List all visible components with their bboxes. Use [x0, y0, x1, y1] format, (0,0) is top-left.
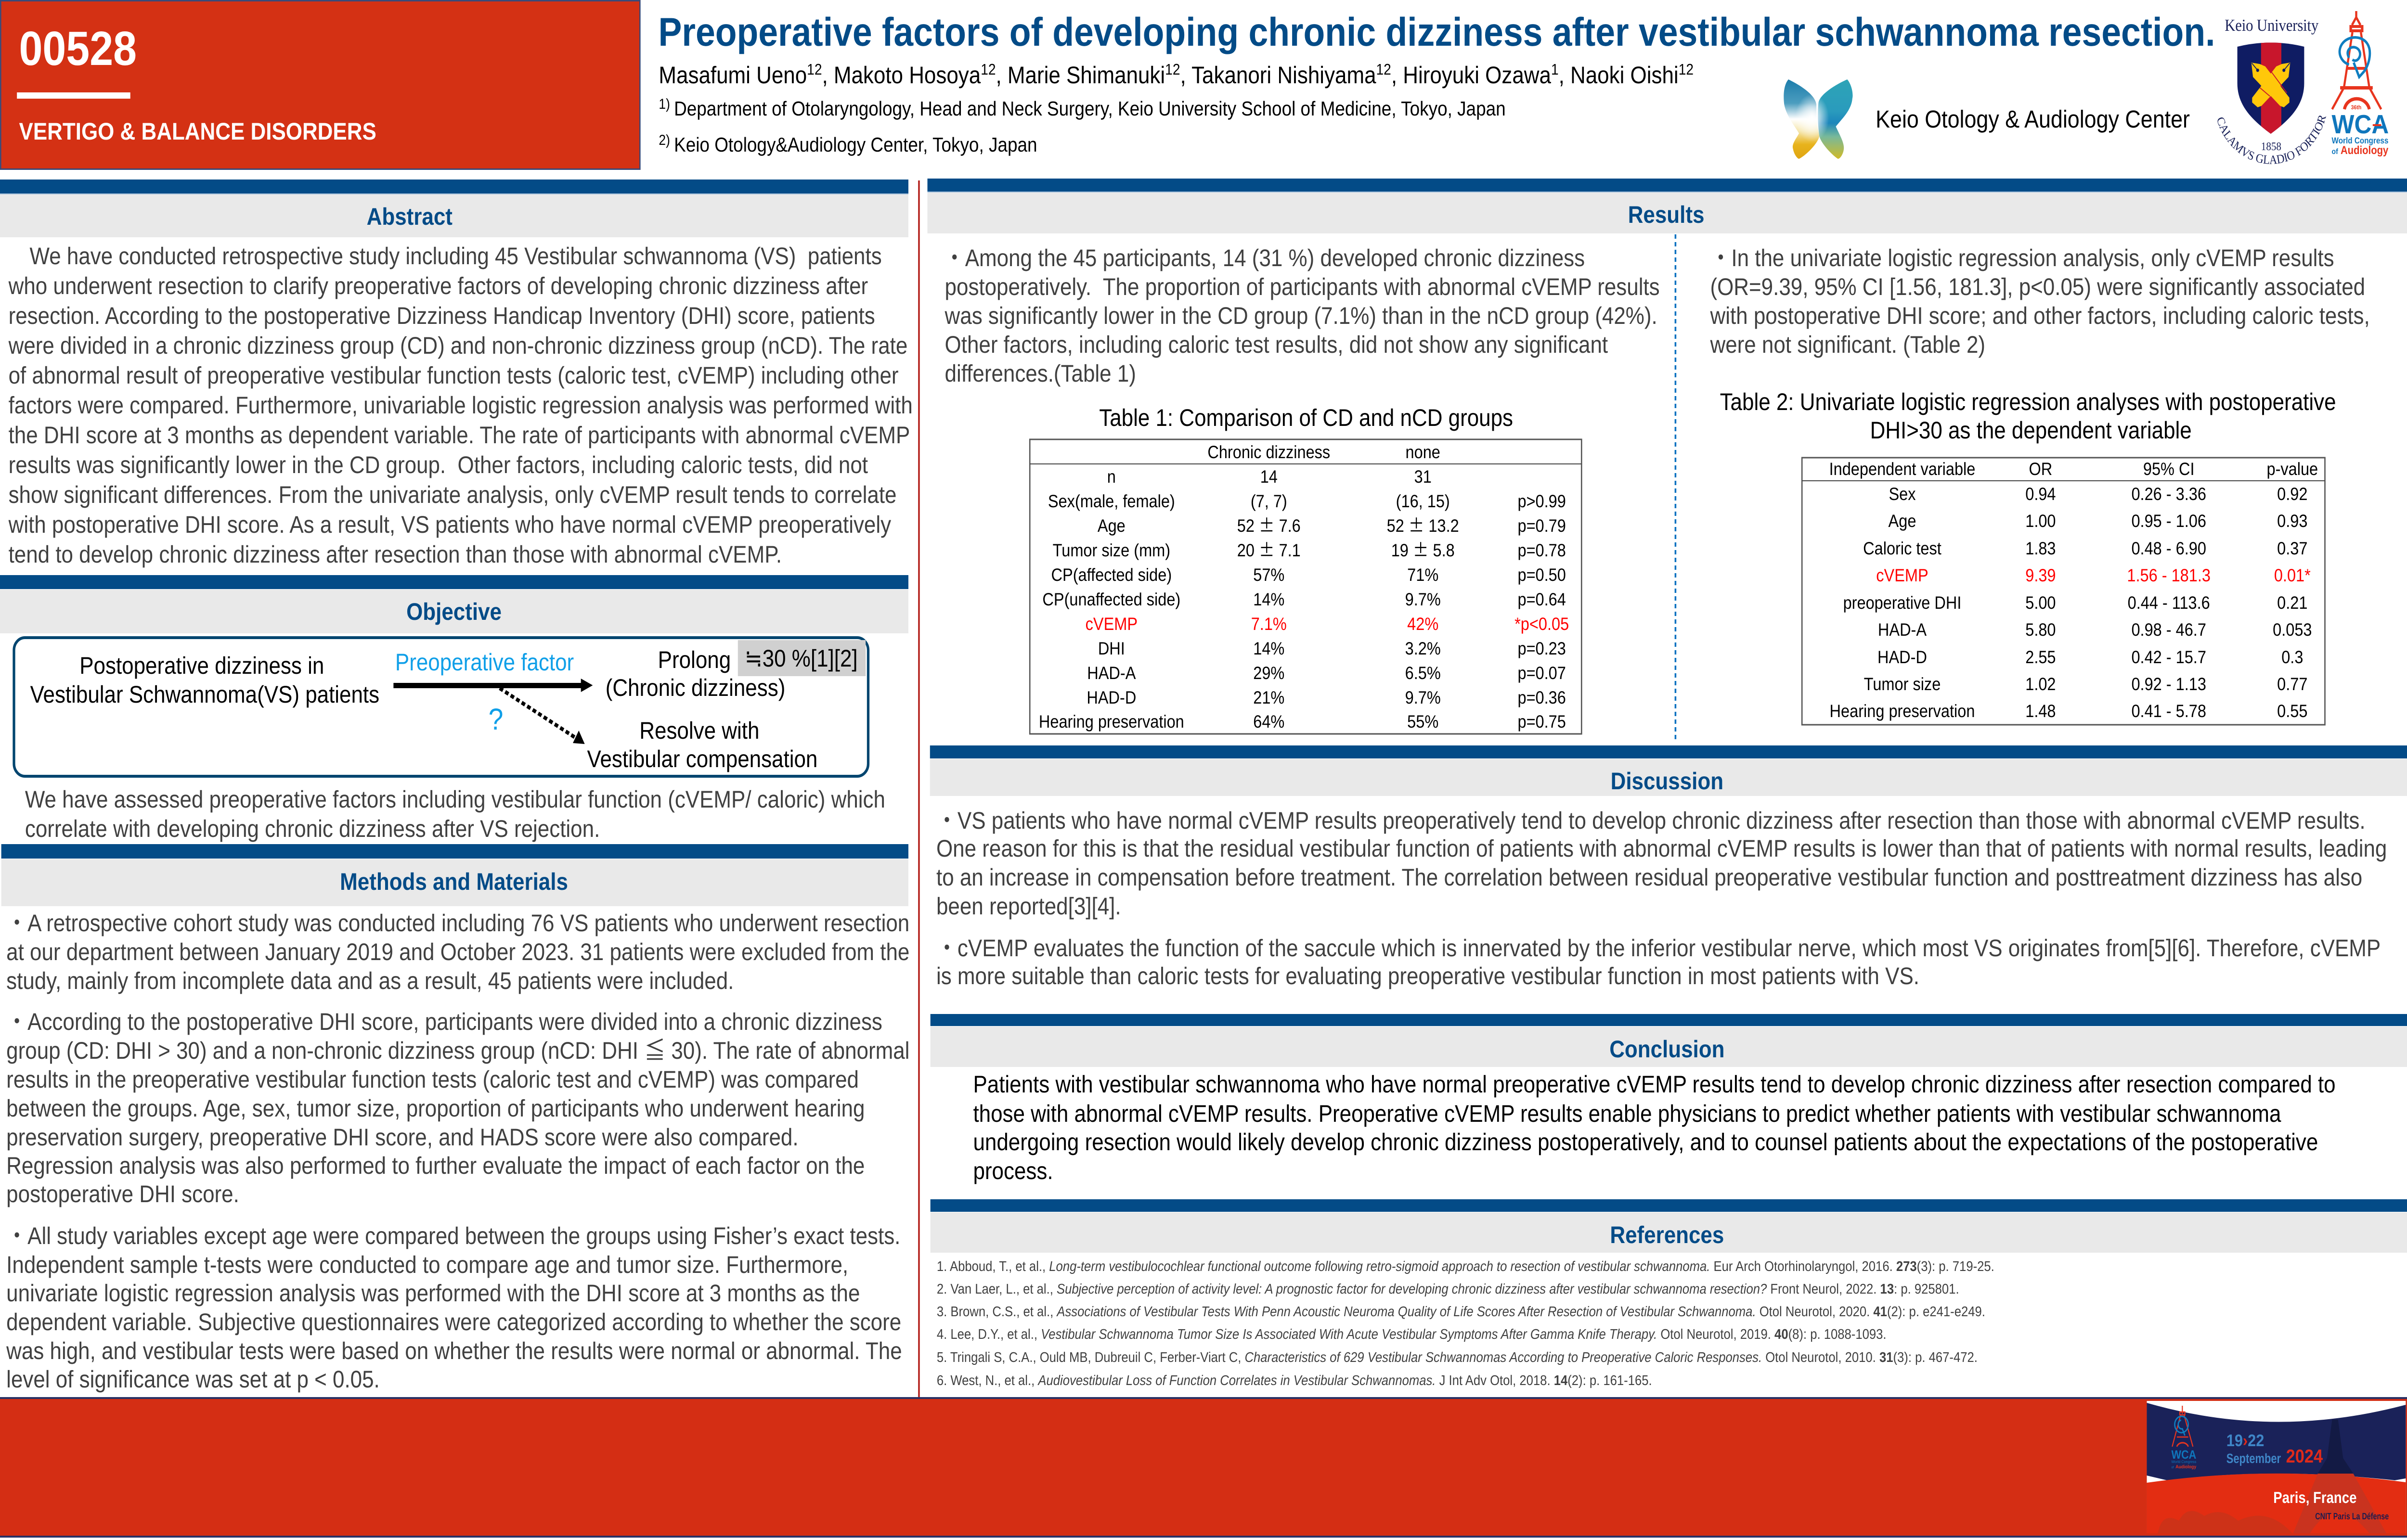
arrow: solid to chronic dizziness — [393, 679, 593, 692]
authors: 1 — [1551, 61, 1559, 78]
table 2: 0.92 — [2277, 484, 2307, 504]
table 1: 7.1% — [1251, 614, 1287, 634]
authors: , Marie Shimanuki — [996, 62, 1165, 89]
table 1: HAD-A — [1087, 663, 1136, 683]
authors: 12 — [807, 61, 822, 78]
methods paragraph 3: Independent sample t-tests were conducted to compare age and tumor size. Furthermore, — [6, 1251, 848, 1278]
abstract body text: tend to develop chronic dizziness after resection than those with abnormal cVEMP. — [9, 541, 782, 568]
table 2: 0.48 - 6.90 — [2131, 539, 2206, 558]
methods paragraph 2: between the groups. Age, sex, tumor size, proportion of participants who underwent hearing — [6, 1095, 865, 1122]
table 1: Age — [1098, 516, 1126, 536]
resolve label: Resolve with — [639, 717, 759, 744]
logo: Keio Otology and Audiology Center butterfly — [1784, 79, 1853, 159]
abstract body text: We have conducted retrospective study including 45 Vestibular schwannoma (VS) patients — [30, 243, 882, 270]
congress banner: September — [2226, 1451, 2281, 1466]
abstract body text: of abnormal result of preoperative vestibular function tests (caloric test, cVEMP) including other — [9, 362, 899, 389]
white accent bar — [17, 92, 130, 99]
panel: results — [928, 179, 2407, 741]
table 2: 0.21 — [2277, 593, 2307, 613]
heading: results: Results — [1628, 201, 1704, 228]
chronic dizziness label: (Chronic dizziness) — [606, 674, 785, 701]
table 2: 0.37 — [2277, 539, 2307, 558]
table 1: p=0.07 — [1517, 663, 1566, 683]
methods paragraph 2: Regression analysis was also performed to further evaluate the impact of each factor on the — [6, 1152, 865, 1179]
table 1: 14 — [1260, 467, 1278, 487]
table 2: Caloric test — [1863, 539, 1941, 558]
table 2: HAD-D — [1877, 647, 1927, 667]
reference list: 3. Brown, C.S., et al., Associations of Vestibular Tests With Penn Acoustic Neuroma Quality of Life Scores After Resection of Vestibular Schwannoma. Otol Neurotol, 2020. 41(2): p. e241-e249. — [937, 1304, 1985, 1320]
heading: discussion: Discussion — [1611, 768, 1723, 795]
table 1: 52 ± 13.2 — [1387, 511, 1459, 537]
preoperative factor label: Preoperative factor — [395, 649, 574, 676]
table 2: 0.01* — [2274, 565, 2311, 585]
table 2: 0.3 — [2281, 647, 2303, 667]
methods paragraph 2: results in the preoperative vestibular function tests (caloric test and cVEMP) was compared — [6, 1066, 859, 1093]
discussion paragraph 1: been reported[3][4]. — [936, 893, 1121, 920]
authors: 12 — [1679, 61, 1694, 78]
table 2: 0.92 - 1.13 — [2131, 674, 2206, 694]
methods paragraph 3: dependent variable. Subjective questionnaires were categorized according to whether the score — [6, 1309, 901, 1335]
table 2: 1.48 — [2025, 701, 2056, 721]
results text right: (OR=9.39, 95% CI [1.56, 181.3], p<0.05) were significantly associated — [1710, 273, 2365, 300]
table 1: (16, 15) — [1396, 491, 1450, 511]
title: Preoperative factors of developing chronic dizziness after vestibular schwannoma resection. — [659, 10, 2215, 54]
table 1: Tumor size (mm) — [1053, 540, 1170, 560]
table 1: p=0.64 — [1517, 590, 1566, 609]
results text left: ・Among the 45 participants, 14 (31 %) developed chronic dizziness — [944, 244, 1585, 271]
methods paragraph 1: ・A retrospective cohort study was conducted including 76 VS patients who underwent resection — [6, 910, 909, 937]
table 2: 9.39 — [2025, 565, 2056, 585]
table 2: 0.26 - 3.36 — [2131, 484, 2206, 504]
table 1: 9.7% — [1405, 590, 1441, 609]
table 1: 19 ± 5.8 — [1391, 536, 1455, 562]
mini WCA logo: WCA — [2171, 1448, 2196, 1462]
objective statement: We have assessed preoperative factors including vestibular function (cVEMP/ caloric) which — [25, 786, 885, 813]
header badge: abstract number and category — [0, 1, 640, 169]
panel: abstract — [0, 180, 919, 568]
table 1: 71% — [1407, 565, 1438, 585]
table 2: Age — [1889, 511, 1916, 531]
abstract body text: resection. According to the postoperative Dizziness Handicap Inventory (DHI) score, patients — [9, 302, 875, 329]
prolong label: Prolong — [658, 646, 731, 673]
results text right: were not significant. (Table 2) — [1710, 331, 1985, 358]
logo: Keio University crest: 1858 — [2261, 141, 2281, 153]
table 2: 0.93 — [2277, 511, 2307, 531]
panel: references — [931, 1199, 2407, 1388]
logo: Keio University crest: Keio University — [2225, 16, 2319, 35]
authors: Masafumi Ueno — [659, 62, 807, 89]
table 2 title: DHI>30 as the dependent variable — [1870, 417, 2192, 444]
congress banner — [2147, 1401, 2406, 1533]
table 1: 64% — [1253, 712, 1284, 732]
objective statement: correlate with developing chronic dizziness after VS rejection. — [25, 815, 600, 842]
results text left: postoperatively. The proportion of participants with abnormal cVEMP results — [945, 273, 1660, 300]
table 1: Hearing preservation — [1039, 712, 1184, 732]
column divider — [918, 180, 920, 1398]
panel: discussion — [930, 745, 2407, 989]
table 2: 0.98 - 46.7 — [2131, 620, 2206, 640]
methods paragraph 2: postoperative DHI score. — [6, 1181, 239, 1207]
abstract body text: the DHI score at 3 months as dependent variable. The rate of participants with abnormal cVEMP — [9, 422, 909, 449]
congress banner: CNIT Paris La Défense — [2315, 1512, 2389, 1522]
table 1: p=0.36 — [1517, 688, 1566, 707]
table 2: OR — [2029, 459, 2052, 479]
table 2: 0.95 - 1.06 — [2131, 511, 2206, 531]
table 1: 52 ± 7.6 — [1237, 511, 1301, 537]
abstract number: 00528 — [19, 22, 137, 76]
authors: 12 — [1376, 61, 1391, 78]
footer band — [0, 1397, 2407, 1538]
discussion paragraph 1: to an increase in compensation before treatment. The correlation between residual preoperative vestibular function and posttreatment dizziness has also — [936, 864, 2362, 891]
table 1: p=0.78 — [1517, 540, 1566, 560]
question mark: ? — [489, 703, 503, 736]
study population label: Vestibular Schwannoma(VS) patients — [30, 681, 379, 708]
methods paragraph 2: group (CD: DHI > 30) and a non-chronic dizziness group (nCD: DHI ≦ 30). The rate of abnormal — [6, 1037, 909, 1064]
study population label: Postoperative dizziness in — [79, 652, 324, 679]
table 1: (7, 7) — [1251, 491, 1287, 511]
heading: conclusion: Conclusion — [1609, 1036, 1724, 1063]
table 2: 0.77 — [2277, 674, 2307, 694]
discussion paragraph 2: ・cVEMP evaluates the function of the saccule which is innervated by the inferior vestibular nerve, which most VS originates from[5][6]. Therefore, cVEMP — [936, 935, 2380, 962]
congress banner: 2024 — [2286, 1446, 2323, 1467]
table 1: 21% — [1253, 688, 1284, 707]
heading: objective: Objective — [406, 598, 502, 625]
discussion paragraph 1: One reason for this is that the residual vestibular function of patients with abnormal cVEMP results is lower than that of patients with normal results, leading — [936, 835, 2387, 862]
abstract body text: show significant differences. From the univariate analysis, only cVEMP result tends to correlate — [9, 481, 897, 508]
reference list: 6. West, N., et al., Audiovestibular Loss of Function Correlates in Vestibular Schwannomas. J Int Adv Otol, 2018. 14(2): p. 161-165. — [937, 1373, 1652, 1388]
table 1: 14% — [1253, 639, 1284, 658]
mini WCA logo — [2171, 1406, 2197, 1470]
methods paragraph 2: preservation surgery, preoperative DHI score, and HADS score were also compared. — [6, 1124, 799, 1151]
methods paragraph 3: was high, and vestibular tests were based on whether the results were normal or abnormal. The — [6, 1337, 902, 1364]
table 1: *p<0.05 — [1514, 614, 1569, 634]
table 2: p-value — [2266, 459, 2318, 479]
eiffel tower silhouette — [2158, 1420, 2386, 1533]
reference list: 1. Abboud, T., et al., Long-term vestibulocochlear functional outcome following retro-sigmoid approach to resection of vestibular schwannoma. Eur Arch Otorhinolaryngol, 2016. 273(3): p. 719-25. — [937, 1259, 1994, 1274]
table 2: 0.55 — [2277, 701, 2307, 721]
table 2: Independent variable — [1829, 459, 1975, 479]
congress location: Paris, France — [2273, 1489, 2356, 1506]
table 1: 20 ± 7.1 — [1237, 536, 1301, 562]
table 2: 1.56 - 181.3 — [2127, 565, 2211, 585]
resolve label: Vestibular compensation — [587, 745, 817, 772]
logo: World Congress of Audiology: Audiology — [2341, 144, 2389, 157]
methods paragraph 1: study, mainly from incomplete data and as a result, 45 patients were included. — [6, 967, 734, 994]
affiliations: 1) — [659, 96, 670, 112]
panel: conclusion — [931, 1014, 2407, 1184]
table 1 title: Table 1: Comparison of CD and nCD groups — [1099, 404, 1513, 431]
table 2: 0.053 — [2273, 620, 2312, 640]
center name: Keio Otology & Audiology Center — [1876, 105, 2190, 133]
methods paragraph 3: univariate logistic regression analysis was performed with the DHI score at 3 months as the — [6, 1280, 860, 1307]
table 1: CP(affected side) — [1051, 565, 1172, 585]
affiliations: Department of Otolaryngology, Head and Neck Surgery, Keio University School of Medicine, Tokyo, Japan — [674, 97, 1506, 120]
authors: 12 — [1165, 61, 1180, 78]
arrow: dotted to vestibular compensation — [500, 688, 585, 744]
table 1: cVEMP — [1086, 614, 1138, 634]
abstract body text: with postoperative DHI score. As a result, VS patients who have normal cVEMP preoperatively — [8, 511, 891, 538]
table 2: 5.00 — [2025, 593, 2056, 613]
logo: Keio University crest — [2217, 16, 2326, 164]
table 1: p=0.79 — [1517, 516, 1566, 536]
objective diagram — [14, 638, 868, 776]
discussion paragraph 2: is more suitable than caloric tests for evaluating preoperative vestibular function in most patients with VS. — [936, 962, 1919, 989]
abstract body text: were divided in a chronic dizziness group (CD) and non-chronic dizziness group (nCD). The rate — [8, 332, 907, 359]
category label: VERTIGO & BALANCE DISORDERS — [19, 118, 376, 145]
heading: references: References — [1610, 1221, 1724, 1248]
table 2: 0.42 - 15.7 — [2131, 647, 2206, 667]
table 1: 42% — [1407, 614, 1438, 634]
mini WCA logo: Audiology — [2175, 1464, 2197, 1470]
abstract body text: factors were compared. Furthermore, univariable logistic regression analysis was performed with — [9, 392, 913, 419]
table 1: DHI — [1098, 639, 1125, 658]
results text left: differences.(Table 1) — [945, 360, 1136, 387]
logo: World Congress of Audiology: World Congress — [2332, 136, 2388, 145]
table 1: HAD-D — [1087, 688, 1136, 707]
mini WCA logo: of — [2171, 1465, 2174, 1469]
table 1: 31 — [1414, 467, 1432, 487]
table 1: 3.2% — [1405, 639, 1441, 658]
affiliations: 2) — [659, 132, 670, 148]
authors: , Hiroyuki Ozawa — [1391, 62, 1551, 89]
methods paragraph 3: ・All study variables except age were compared between the groups using Fisher’s exact tests. — [6, 1222, 900, 1249]
table 2: cVEMP — [1876, 565, 1928, 585]
table 2: 0.94 — [2025, 484, 2056, 504]
table 1: p=0.50 — [1517, 565, 1566, 585]
authors: , Makoto Hosoya — [822, 62, 981, 89]
logo: World Congress of Audiology: of — [2332, 148, 2338, 156]
panel: objective — [0, 575, 908, 842]
logo: World Congress of Audiology: WCA — [2332, 109, 2389, 139]
table 1: 9.7% — [1405, 688, 1441, 707]
table 2: Hearing preservation — [1830, 701, 1975, 721]
affiliations: Keio Otology&Audiology Center, Tokyo, Japan — [674, 133, 1037, 156]
table 1: Sex(male, female) — [1048, 491, 1175, 511]
panel: methods and materials — [1, 844, 916, 1393]
table 2: 0.41 - 5.78 — [2131, 701, 2206, 721]
abstract body text: results was significantly lower in the CD group. Other factors, including caloric tests, did not — [9, 451, 868, 478]
results text right: with postoperative DHI score; and other factors, including caloric tests, — [1710, 302, 2370, 329]
discussion paragraph 1: ・VS patients who have normal cVEMP results preoperatively tend to develop chronic dizziness after resection than those with abnormal cVEMP results. — [936, 807, 2366, 834]
table 2: 2.55 — [2025, 647, 2056, 667]
results column divider — [1674, 234, 1676, 741]
table 1 — [1030, 439, 1581, 734]
table 1: p=0.23 — [1517, 639, 1566, 658]
table 1: CP(unaffected side) — [1042, 590, 1180, 609]
table 1: p=0.75 — [1517, 712, 1566, 732]
conclusion text: Patients with vestibular schwannoma who have normal preoperative cVEMP results tend to develop chronic dizziness after resection compared to — [973, 1071, 2336, 1098]
table 1: 14% — [1253, 590, 1284, 609]
reference list: 2. Van Laer, L., et al., Subjective perception of activity level: A prognostic factor for developing chronic dizziness after vestibular schwannoma resection? Front Neurol, 2022. 13: p. 925801. — [937, 1282, 1959, 1297]
table 1: none — [1406, 442, 1440, 462]
gray citation box — [738, 640, 866, 676]
congress dates: 19›22 — [2226, 1431, 2264, 1450]
table 2: 5.80 — [2025, 620, 2056, 640]
reference list: 5. Tringali S, C.A., Ould MB, Dubreuil C, Ferber-Viart C, Characteristics of 629 Vestibular Schwannomas According to Preoperative Caloric Responses. Otol Neurotol, 2010. 31(3): p. 467-472. — [937, 1350, 1978, 1365]
methods paragraph 2: ・According to the postoperative DHI score, participants were divided into a chronic dizziness — [6, 1008, 882, 1035]
conclusion text: undergoing resection would likely develop chronic dizziness postoperatively, and to counsel patients about the expectations of the postoperative — [973, 1129, 2318, 1155]
table 1: n — [1107, 467, 1116, 487]
conclusion text: those with abnormal cVEMP results. Preoperative cVEMP results enable physicians to predict whether patients with vestibular schwannoma — [973, 1100, 2281, 1127]
heading: methods: Methods and Materials — [340, 868, 568, 895]
table 2: Tumor size — [1864, 674, 1941, 694]
results text left: was significantly lower in the CD group (7.1%) than in the nCD group (42%). — [945, 302, 1657, 329]
reference list: 4. Lee, D.Y., et al., Vestibular Schwannoma Tumor Size Is Associated With Acute Vestibular Symptoms After Gamma Knife Therapy. Otol Neurotol, 2019. 40(8): p. 1088-1093. — [937, 1327, 1887, 1342]
mini WCA logo: World Congress — [2171, 1460, 2196, 1464]
table 1: 55% — [1407, 712, 1438, 732]
table 2 — [1802, 458, 2325, 725]
authors: , Takanori Nishiyama — [1180, 62, 1376, 89]
authors: 12 — [981, 61, 996, 78]
affiliations — [659, 96, 1506, 156]
table 2: Sex — [1889, 484, 1916, 504]
conclusion text: process. — [973, 1157, 1053, 1184]
table 2: preoperative DHI — [1843, 593, 1961, 613]
heading: abstract: Abstract — [367, 203, 453, 230]
table 1: 29% — [1253, 663, 1284, 683]
table 2: 0.44 - 113.6 — [2128, 593, 2210, 613]
table 2: 1.00 — [2025, 511, 2056, 531]
logo: Keio University crest: CALAMVS GLADIO FORTIOR — [2217, 116, 2326, 164]
table 2: 95% CI — [2143, 459, 2195, 479]
reference list — [937, 1259, 1994, 1388]
methods paragraph 3: level of significance was set at p < 0.05. — [6, 1366, 380, 1393]
citation percentage: ≒30 %[1][2] — [745, 639, 858, 674]
table 2: HAD-A — [1878, 620, 1927, 640]
authors: , Naoki Oishi — [1559, 62, 1679, 89]
logo: World Congress of Audiology — [2332, 11, 2389, 157]
table 2: 1.83 — [2025, 539, 2056, 558]
table 1: Chronic dizziness — [1207, 442, 1330, 462]
table 1: 57% — [1253, 565, 1284, 585]
table 2 title: Table 2: Univariate logistic regression analyses with postoperative — [1720, 388, 2336, 415]
table 1: p>0.99 — [1517, 491, 1566, 511]
table 1: 6.5% — [1405, 663, 1441, 683]
results text right: ・In the univariate logistic regression analysis, only cVEMP results — [1710, 244, 2334, 271]
table 2: 1.02 — [2025, 674, 2056, 694]
abstract body text: who underwent resection to clarify preoperative factors of developing chronic dizziness after — [8, 272, 868, 299]
logo: World Congress of Audiology: 36th — [2351, 104, 2361, 111]
methods paragraph 1: at our department between January 2019 and October 2023. 31 patients were excluded from the — [6, 938, 909, 965]
results text left: Other factors, including caloric test results, did not show any significant — [945, 331, 1608, 358]
